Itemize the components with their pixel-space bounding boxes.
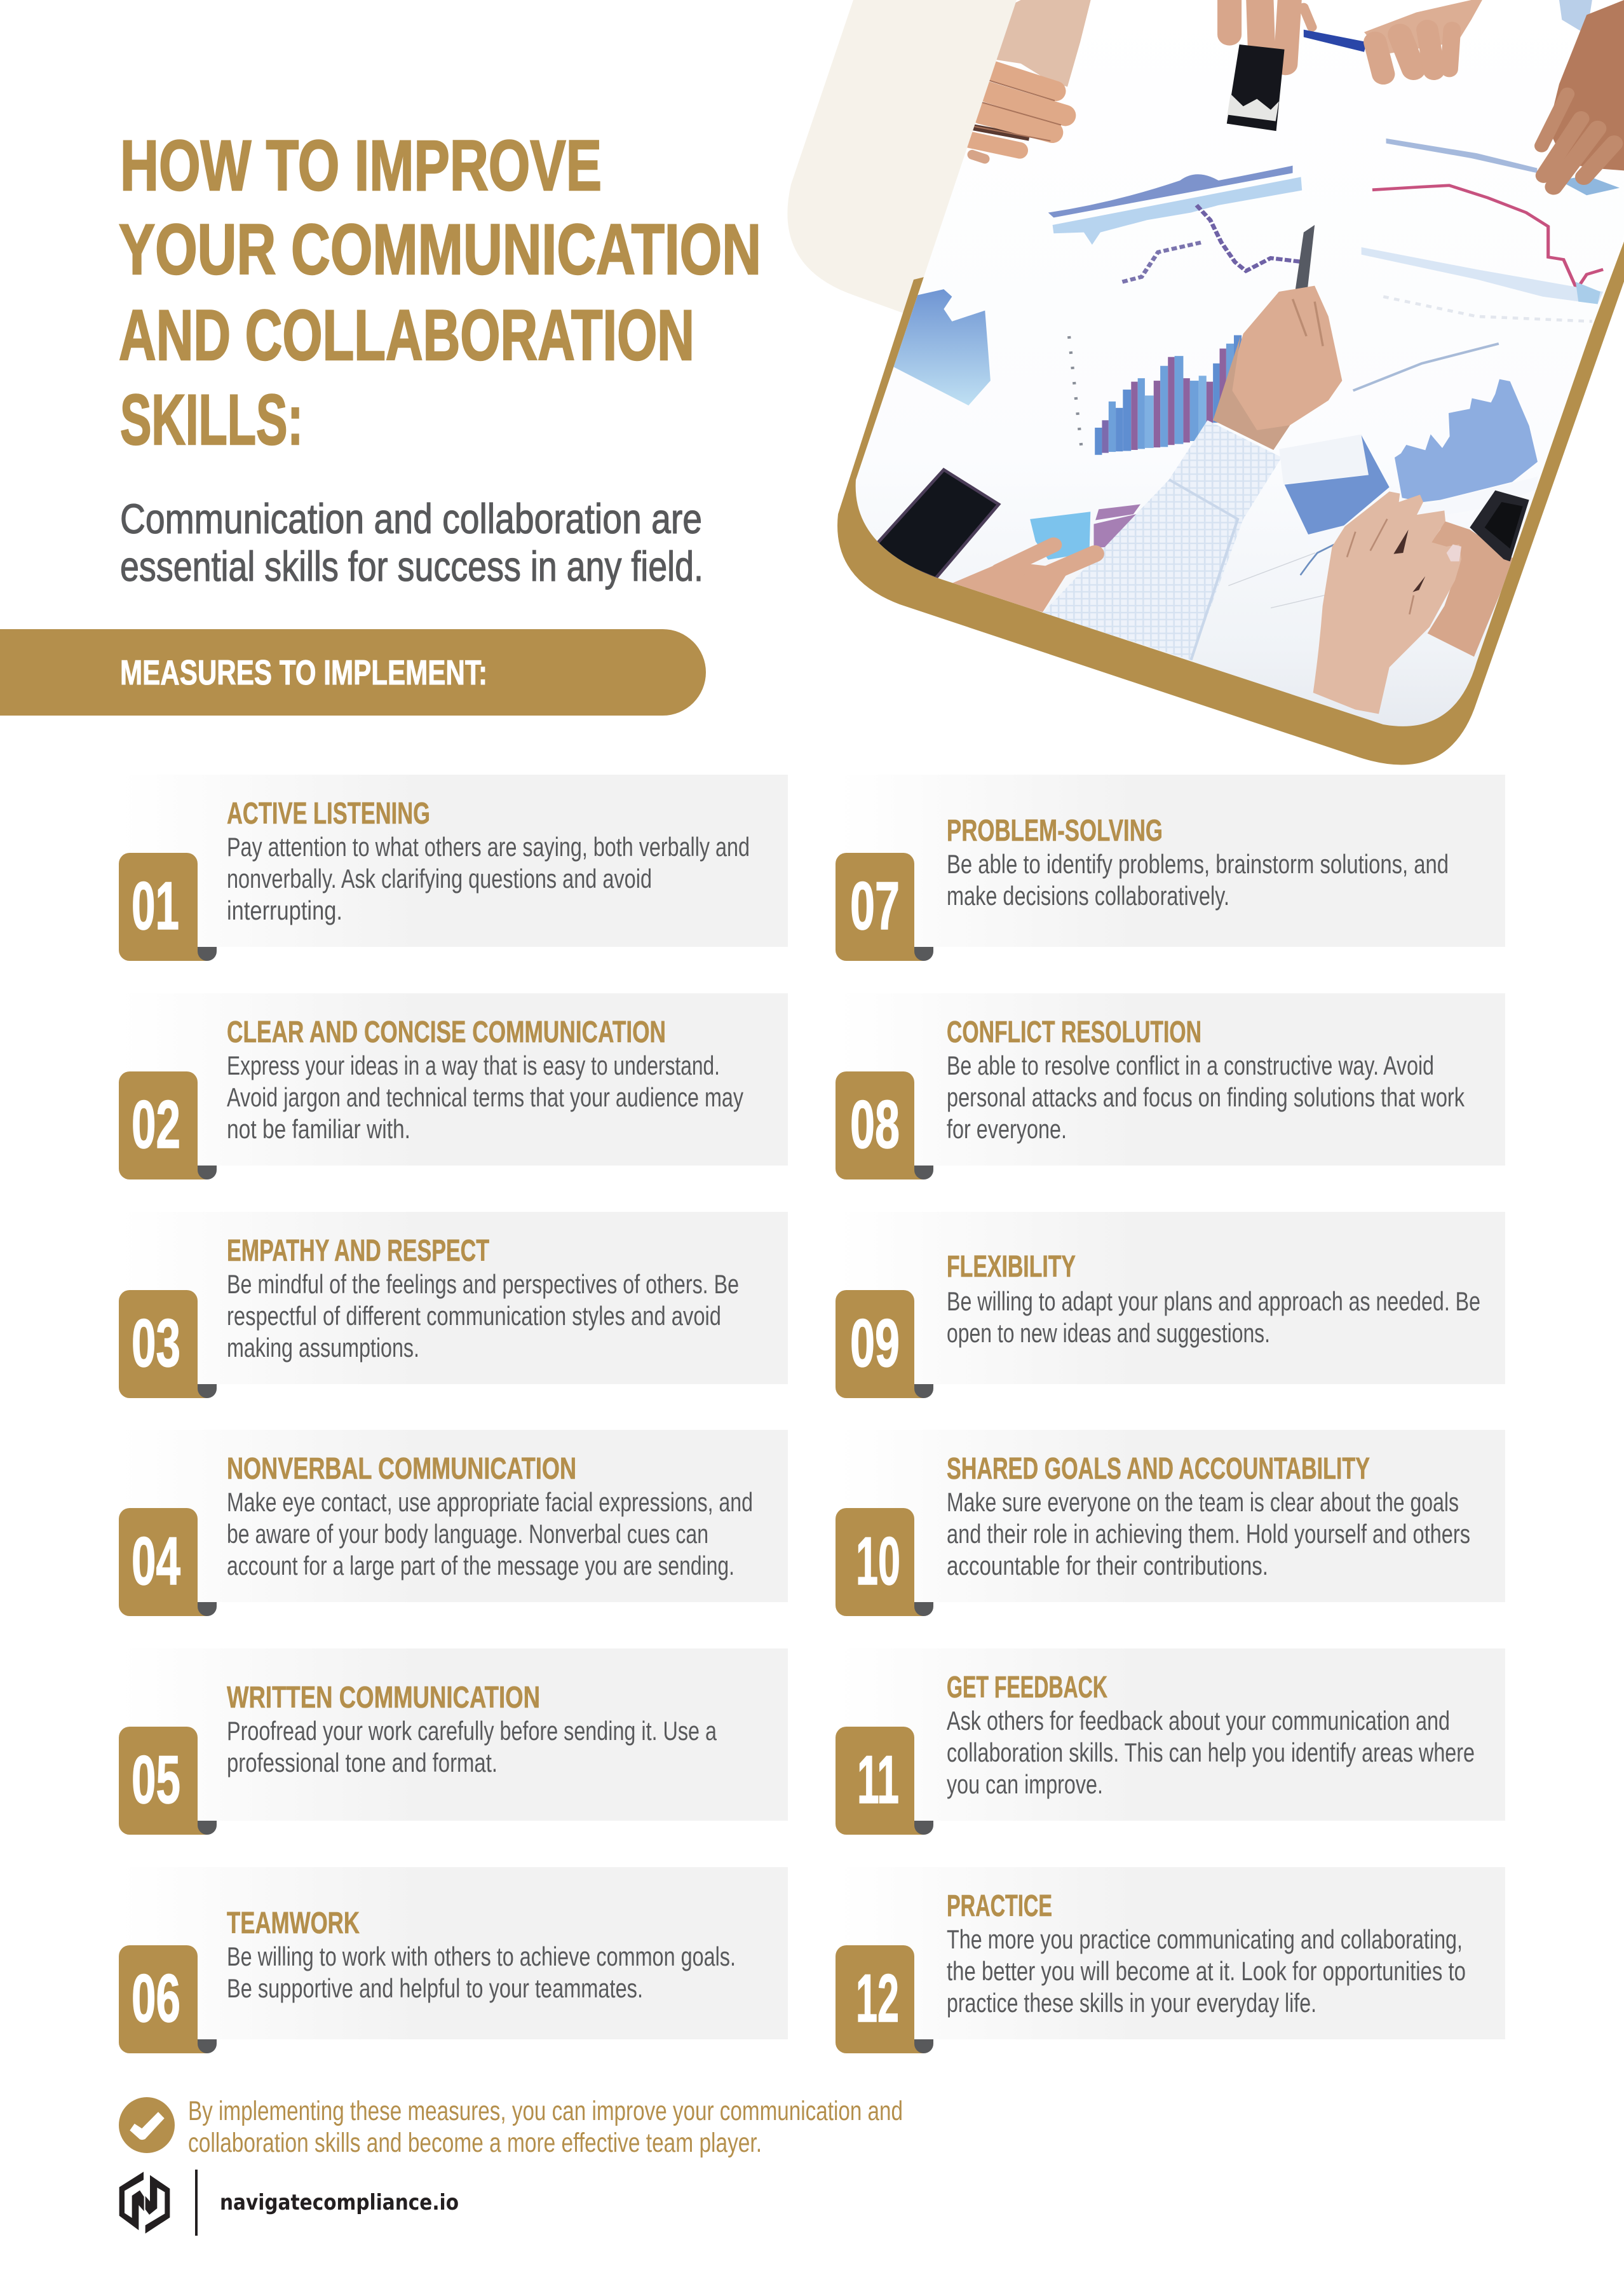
panel: item 11 get feedback: you can improve. (947, 1769, 1103, 1799)
panel: item 10 shared goals and accountability: accountable for their contributions. (947, 1551, 1268, 1580)
panel: item 06 teamwork: TEAMWORK (227, 1907, 360, 1940)
paper sheet (1279, 434, 1370, 484)
panel: item 03 empathy and respect: Be mindful of the feelings and perspectives of others. Be (227, 1269, 739, 1299)
icon: phone top (1227, 44, 1285, 131)
panel: item 01 active listening: ACTIVE LISTENING (227, 797, 430, 831)
closing statement (188, 2096, 903, 2158)
panel: item 09 flexibility: Be willing to adapt your plans and approach as needed. Be (947, 1286, 1480, 1316)
panel: item 02 clear and concise communication: Avoid jargon and technical terms that your audience may (227, 1082, 743, 1112)
panel: item 07 problem-solving: 07 (850, 867, 900, 944)
icon: check mark circle (119, 2097, 175, 2153)
panel: item 10 shared goals and accountability: Make sure everyone on the team is clear about the goals (947, 1487, 1459, 1517)
panel: item 10 shared goals and accountability: SHARED GOALS AND ACCOUNTABILITY (947, 1452, 1370, 1486)
panel: item 03 empathy and respect: respectful of different communication styles and avoid (227, 1301, 721, 1331)
panel: item 06 teamwork: Be supportive and helpful to your teammates. (227, 1973, 643, 2003)
panel: item 11 get feedback: 11 (857, 1741, 899, 1818)
icon: watch (1470, 491, 1529, 561)
panel: item 07 problem-solving: PROBLEM-SOLVING (947, 814, 1163, 848)
panel: item 10 shared goals and accountability: and their role in achieving them. Hold yourself and others (947, 1519, 1470, 1549)
panel: item 12 practice (836, 1867, 1505, 2053)
panel: item 06 teamwork: 06 (132, 1960, 180, 2036)
title: SKILLS: (120, 380, 303, 459)
panel: item 03 empathy and respect (119, 1212, 788, 1398)
hand: bottom left (949, 545, 1095, 612)
panel: item 02 clear and concise communication: 02 (132, 1086, 180, 1162)
panel: item 08 conflict resolution: CONFLICT RESOLUTION (947, 1016, 1201, 1049)
subtitle: essential skills for success in any field. (120, 543, 703, 590)
panel: item 04 nonverbal communication: Make eye contact, use appropriate facial expressions, and (227, 1487, 753, 1517)
icon: pie chart (1030, 505, 1140, 560)
panel: item 07 problem-solving: make decisions collaboratively. (947, 881, 1229, 911)
title: HOW TO IMPROVE (120, 126, 602, 205)
logo: navigatecompliance: navigatecompliance.io (220, 2190, 459, 2215)
chart: axis strip (1307, 477, 1538, 548)
panel: item 04 nonverbal communication: 04 (132, 1523, 180, 1599)
closing statement: By implementing these measures, you can improve your communication and (188, 2096, 903, 2126)
panel: item 10 shared goals and accountability: 10 (856, 1523, 900, 1599)
panel: item 09 flexibility: FLEXIBILITY (947, 1250, 1076, 1284)
panel: item 01 active listening: 01 (132, 867, 179, 944)
panel: item 11 get feedback: collaboration skills. This can help you identify areas where (947, 1737, 1475, 1767)
panel: item 04 nonverbal communication: be aware of your body language. Nonverbal cues can (227, 1519, 708, 1549)
panel: item 07 problem-solving: Be able to identify problems, brainstorm solutions, and (947, 849, 1449, 879)
panel: item 02 clear and concise communication (119, 993, 788, 1179)
panel: item 12 practice: the better you will become at it. Look for opportunities to (947, 1956, 1466, 1986)
chart: small line (1301, 545, 1334, 575)
panel: item 01 active listening: Pay attention to what others are saying, both verbally and (227, 832, 750, 862)
icon: phone bottom left (877, 470, 999, 578)
panel: item 01 active listening: nonverbally. Ask clarifying questions and avoid (227, 864, 652, 894)
panel: item 09 flexibility (836, 1212, 1505, 1398)
charts and hands: lower right (1228, 379, 1538, 714)
panel: item 05 written communication: 05 (132, 1741, 180, 1818)
panel: item 06 teamwork (119, 1867, 788, 2053)
panel: item 05 written communication: WRITTEN COMMUNICATION (227, 1681, 540, 1715)
panel: item 03 empathy and respect: EMPATHY AND RESPECT (227, 1234, 489, 1268)
chart: left blue area (891, 289, 991, 405)
logo: navigatecompliance (119, 2170, 459, 2236)
panel: item 12 practice: PRACTICE (947, 1889, 1052, 1923)
photo: team hands over charts (826, 0, 1624, 763)
panel: item 08 conflict resolution (836, 993, 1505, 1179)
panel: item 05 written communication (119, 1648, 788, 1835)
panel: item 08 conflict resolution: 08 (850, 1086, 900, 1162)
panel: item 09 flexibility: 09 (850, 1305, 900, 1381)
hand: top right (1364, 0, 1482, 74)
chart: upper paper (1048, 166, 1304, 282)
hand: top centre (1229, 0, 1312, 64)
title (119, 126, 761, 459)
icon: pen in hand (1296, 225, 1315, 289)
paper edges (1228, 553, 1325, 608)
panel: item 12 practice: The more you practice communicating and collaborating, (947, 1924, 1463, 1954)
hand: top left (970, 0, 1091, 159)
panel: item 03 empathy and respect: making assumptions. (227, 1333, 419, 1363)
chart: upper right paper (1353, 139, 1620, 391)
title: AND COLLABORATION (119, 296, 694, 375)
panel: item 08 conflict resolution: personal attacks and focus on finding solutions that work (947, 1082, 1465, 1112)
subtitle: Communication and collaboration are (120, 495, 702, 542)
panel: item 04 nonverbal communication (119, 1430, 788, 1616)
panel: item 11 get feedback: GET FEEDBACK (947, 1671, 1107, 1704)
gold photo frame (837, 241, 1624, 765)
panel: item 02 clear and concise communication: CLEAR AND CONCISE COMMUNICATION (227, 1016, 666, 1049)
panel: item 02 clear and concise communication: not be familiar with. (227, 1114, 410, 1144)
closing statement: collaboration skills and become a more effective team player. (188, 2128, 762, 2158)
panel: item 05 written communication: Proofread your work carefully before sending it. Use a (227, 1716, 717, 1746)
panel: item 04 nonverbal communication: account for a large part of the message you are sending. (227, 1551, 734, 1580)
panel: item 11 get feedback (836, 1648, 1505, 1835)
banner: measures to implement (0, 629, 706, 716)
panel: item 01 active listening (119, 775, 788, 961)
chart: blue triangle area (1285, 435, 1390, 535)
panel: item 12 practice: 12 (856, 1960, 899, 2036)
banner: measures to implement: MEASURES TO IMPLEMENT: (120, 653, 487, 692)
hand: front (1313, 491, 1461, 714)
panel: item 05 written communication: professional tone and format. (227, 1748, 497, 1777)
panel: item 11 get feedback: Ask others for feedback about your communication and (947, 1706, 1450, 1736)
chart: bar chart (1095, 335, 1242, 455)
panel: item 07 problem-solving (836, 775, 1505, 961)
panel: item 01 active listening: interrupting. (227, 895, 342, 925)
hand: centre (1213, 286, 1342, 450)
panel: item 03 empathy and respect: 03 (132, 1305, 180, 1381)
panel: item 10 shared goals and accountability (836, 1430, 1505, 1616)
panel: item 04 nonverbal communication: NONVERBAL COMMUNICATION (227, 1452, 576, 1486)
icon: blue pen (1304, 30, 1367, 52)
hand: back (1425, 521, 1514, 656)
subtitle (120, 495, 703, 590)
panel: item 06 teamwork: Be willing to work with others to achieve common goals. (227, 1941, 736, 1971)
chart: large area (1395, 379, 1538, 502)
panel: item 08 conflict resolution: for everyone. (947, 1114, 1067, 1144)
decorative beige shape (787, 0, 1029, 324)
title: YOUR COMMUNICATION (119, 210, 761, 289)
hand: far right (1541, 0, 1624, 187)
shirt sleeve (1043, 420, 1282, 660)
panel: item 02 clear and concise communication: Express your ideas in a way that is easy to understand. (227, 1050, 720, 1080)
panel: item 08 conflict resolution: Be able to resolve conflict in a constructive way. Avoid (947, 1050, 1434, 1080)
chart: axis ticks (1069, 336, 1082, 455)
panel: item 12 practice: practice these skills in your everyday life. (947, 1988, 1316, 2018)
panel: item 09 flexibility: open to new ideas and suggestions. (947, 1318, 1270, 1348)
